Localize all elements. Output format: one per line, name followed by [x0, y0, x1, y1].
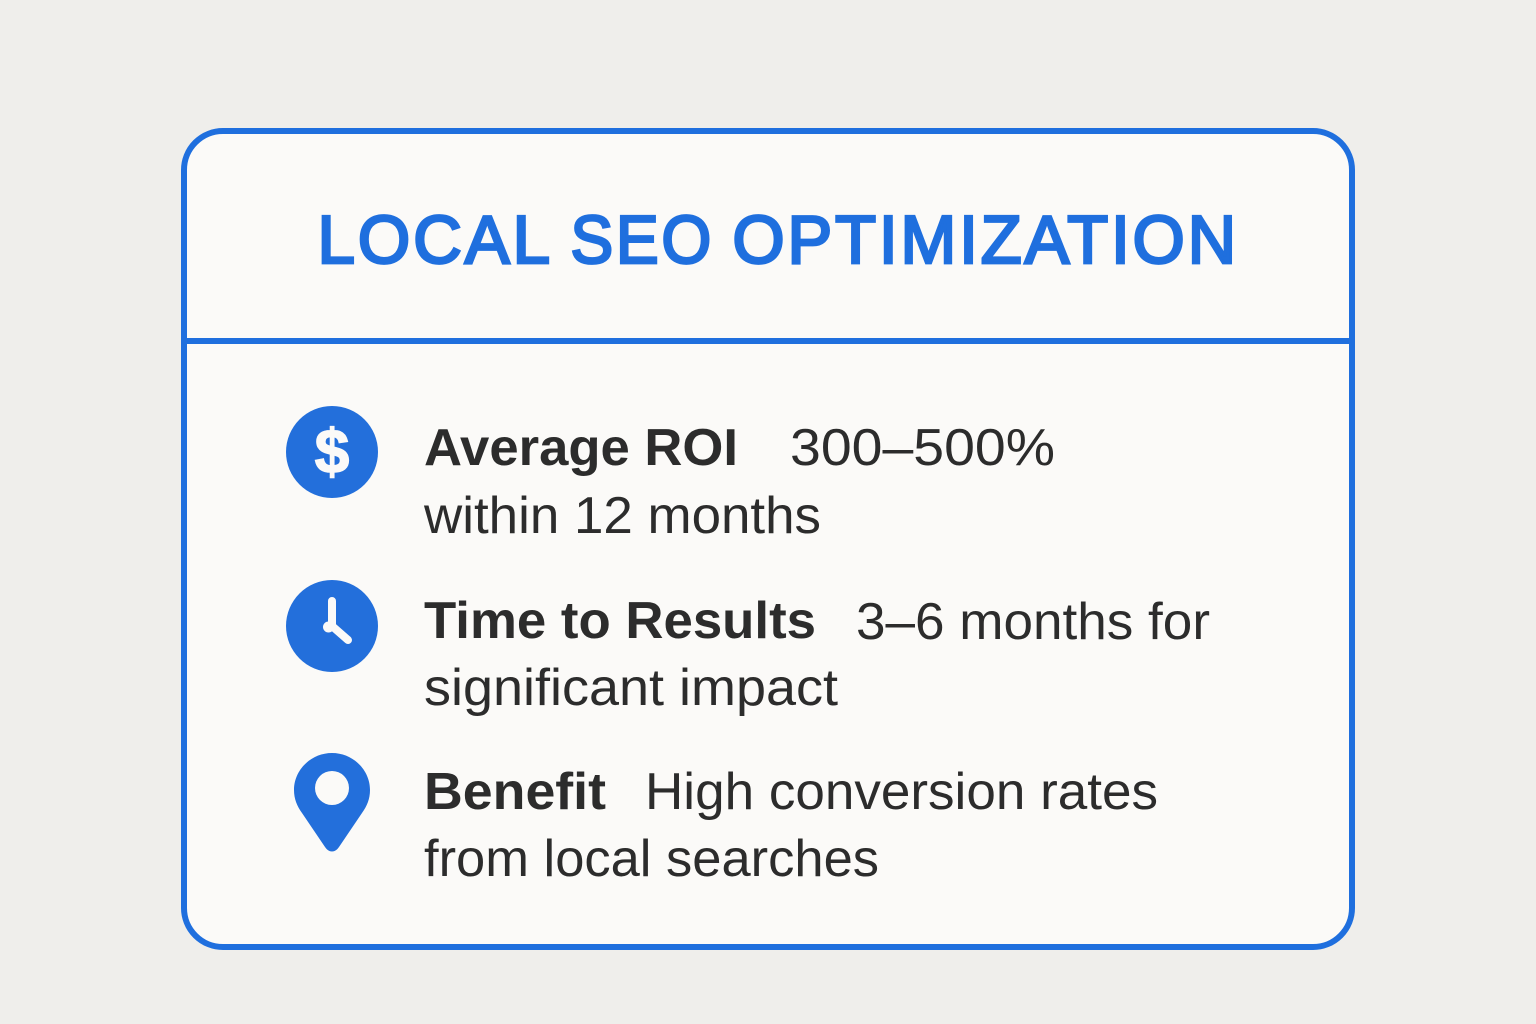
text block: benefit [424, 763, 1158, 888]
title: OPTIMIZATION [732, 202, 1239, 278]
icon: clock [286, 580, 378, 672]
text block: benefit: High conversion rates [645, 763, 1158, 821]
text block: average ROI [423, 419, 1055, 545]
text block: average ROI: 300–500% [790, 419, 1055, 477]
text block: time to results: 3–6 months for [856, 593, 1210, 651]
text block: benefit: from local searches [424, 830, 879, 888]
icon: location pin [294, 753, 370, 852]
panel: local SEO card [184, 131, 1352, 947]
text block: average ROI: Average ROI [424, 419, 738, 477]
icon: dollar: $ [315, 418, 349, 487]
title: LOCAL [318, 202, 553, 278]
title: SEO [570, 202, 714, 278]
text block: time to results: significant impact [424, 659, 839, 717]
text block: time to results [424, 592, 1210, 717]
text block: average ROI: within 12 months [423, 487, 821, 545]
text block: benefit: Benefit [424, 763, 606, 821]
title [318, 202, 1239, 278]
text block: time to results: Time to Results [424, 592, 816, 650]
icon: dollar [286, 406, 378, 498]
